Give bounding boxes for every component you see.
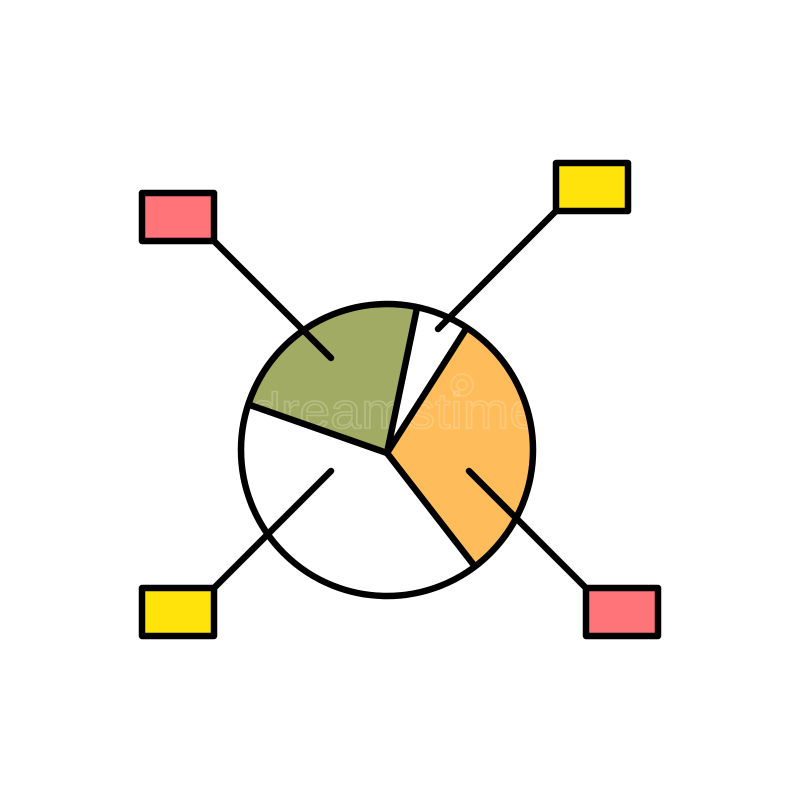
label box: top right yellow xyxy=(556,163,628,211)
connector: bottom left xyxy=(214,471,331,588)
label box: top left pink xyxy=(142,193,214,241)
slice: green xyxy=(252,307,414,449)
slice divider lines xyxy=(250,308,473,564)
connector: bottom right xyxy=(469,471,586,588)
pie chart diagram with four labels xyxy=(138,160,662,640)
connector: top right xyxy=(438,211,556,329)
pie base xyxy=(241,304,533,596)
slice: orange xyxy=(391,332,530,562)
pie outline xyxy=(241,304,533,596)
pie chart xyxy=(238,300,536,600)
label box: bottom right pink xyxy=(586,588,658,636)
connector: top left xyxy=(214,241,331,358)
watermark: dreamstime xyxy=(250,383,540,439)
label box: bottom left yellow xyxy=(142,588,214,636)
